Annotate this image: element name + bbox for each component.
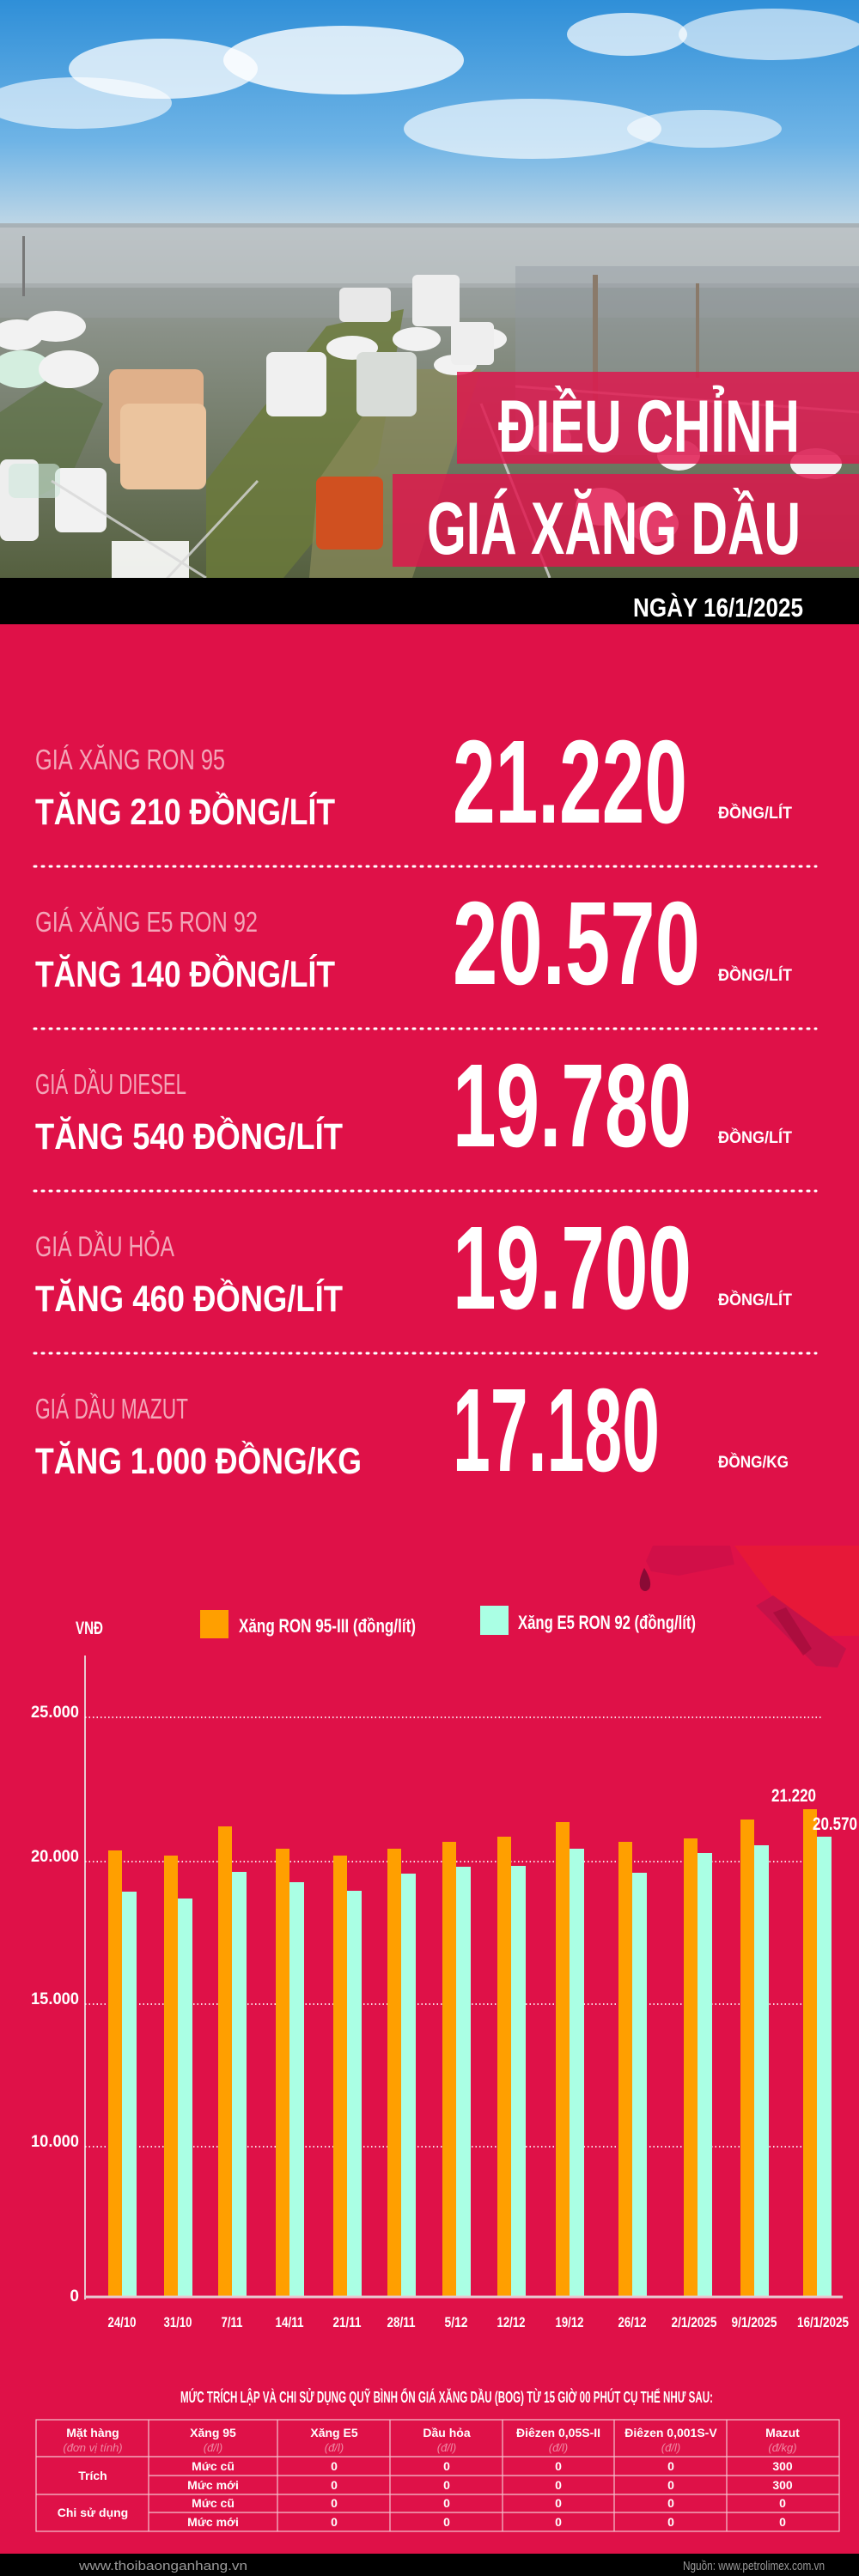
table: BOG fund: (đ/l) (204, 2441, 222, 2454)
price row: RON 95 (34, 716, 816, 866)
bar chart: fuel prices: 0 (70, 2287, 79, 2306)
table: BOG fund: Chi sử dụng (58, 2506, 128, 2519)
bar chart: fuel prices: 9/1/2025 (732, 2314, 777, 2330)
table: BOG fund: Mức mới (187, 2478, 239, 2492)
price row: mazut: TĂNG 1.000 ĐỒNG/KG (35, 1440, 362, 1482)
price row: E5 RON 92: ĐỒNG/LÍT (718, 966, 792, 985)
price row: E5 RON 92: TĂNG 140 ĐỒNG/LÍT (35, 953, 335, 995)
table: BOG fund: Mức mới (187, 2515, 239, 2529)
date bar: NGÀY 16/1/2025 (633, 592, 803, 623)
price row: kerosene: GIÁ DẦU HỎA (35, 1230, 174, 1262)
table: BOG fund: 0 (331, 2478, 338, 2492)
table: BOG fund: Mặt hàng (66, 2426, 119, 2439)
date bar (0, 578, 859, 624)
price row: diesel (34, 1040, 816, 1191)
footer (0, 2554, 859, 2576)
table: BOG fund: 0 (555, 2496, 562, 2510)
table: BOG fund: 0 (779, 2515, 786, 2529)
price row: mazut (35, 1364, 789, 1497)
bar chart: fuel prices: 14/11 (275, 2314, 304, 2330)
price row: diesel: 19.780 (453, 1040, 691, 1172)
bar chart: fuel prices: 12/12 (497, 2314, 526, 2330)
footer: Nguồn: www.petrolimex.com.vn (683, 2559, 825, 2573)
table: BOG fund: 0 (555, 2515, 562, 2529)
price row: diesel: TĂNG 540 ĐỒNG/LÍT (35, 1115, 343, 1157)
chart legend: VNĐ (76, 1619, 103, 1638)
bar chart: fuel prices: 28/11 (387, 2314, 416, 2330)
bar chart: fuel prices: 20.000 (31, 1848, 79, 1866)
table: BOG fund: Điêzen 0,05S-II (516, 2426, 600, 2439)
price row: kerosene: ĐỒNG/LÍT (718, 1291, 792, 1309)
table: BOG fund: (đ/l) (437, 2441, 456, 2454)
table: BOG fund: 0 (443, 2515, 450, 2529)
bar chart: fuel prices: 5/12 (445, 2314, 467, 2330)
price row: mazut: GIÁ DẦU MAZUT (35, 1393, 188, 1425)
table: BOG fund: 0 (667, 2478, 674, 2492)
table: BOG fund (36, 2420, 839, 2531)
price row: kerosene: TĂNG 460 ĐỒNG/LÍT (35, 1278, 343, 1320)
price row: RON 95: 21.220 (453, 716, 687, 848)
price row: E5 RON 92 (34, 878, 816, 1029)
bar chart: fuel prices: 2/1/2025 (672, 2314, 716, 2330)
bar chart: fuel prices: 10.000 (31, 2133, 79, 2151)
bar chart: fuel prices: 21.220 (771, 1786, 816, 1806)
table: BOG fund: 0 (555, 2459, 562, 2473)
table: BOG fund: (đ/l) (549, 2441, 568, 2454)
table: BOG fund: Mức cũ (192, 2496, 235, 2510)
table: BOG fund: 0 (667, 2515, 674, 2529)
table: BOG fund: 0 (331, 2515, 338, 2529)
table: BOG fund: 0 (443, 2459, 450, 2473)
table: BOG fund: 300 (772, 2478, 793, 2492)
bar chart: fuel prices: 21/11 (333, 2314, 361, 2330)
table: BOG fund: Trích (78, 2469, 107, 2482)
table: BOG fund: 0 (667, 2459, 674, 2473)
table: BOG fund: 0 (331, 2496, 338, 2510)
bar chart: fuel prices: 26/12 (618, 2314, 646, 2330)
price row: mazut: ĐỒNG/KG (718, 1453, 789, 1472)
price row: E5 RON 92: 20.570 (453, 878, 700, 1010)
table: BOG fund: (đ/kg) (768, 2441, 797, 2454)
table: BOG fund: Dầu hỏa (423, 2426, 471, 2439)
price row: RON 95: TĂNG 210 ĐỒNG/LÍT (35, 791, 335, 833)
bar chart: fuel prices: 15.000 (31, 1990, 79, 2008)
chart legend: Xăng RON 95-III (đồng/lít) (239, 1615, 416, 1637)
table: BOG fund: 0 (779, 2496, 786, 2510)
table: BOG fund: Xăng E5 (310, 2426, 358, 2439)
table: BOG fund: Mức cũ (192, 2459, 235, 2473)
price row: E5 RON 92: GIÁ XĂNG E5 RON 92 (35, 906, 258, 938)
icon: fuel nozzle (640, 1546, 859, 1668)
table: BOG fund: 0 (331, 2459, 338, 2473)
price row: kerosene: 19.700 (453, 1202, 691, 1334)
bar chart: fuel prices: 19/12 (555, 2314, 584, 2330)
table: BOG fund: 300 (772, 2459, 793, 2473)
table: BOG fund: Mazut (765, 2426, 800, 2439)
bar chart: fuel prices: 25.000 (31, 1704, 79, 1722)
header photo: refinery (0, 0, 859, 601)
table: BOG fund: 0 (667, 2496, 674, 2510)
bar chart: fuel prices: 7/11 (222, 2314, 242, 2330)
price row: diesel: ĐỒNG/LÍT (718, 1128, 792, 1147)
price row: RON 95: GIÁ XĂNG RON 95 (35, 744, 225, 775)
table: BOG fund: 0 (443, 2496, 450, 2510)
bar chart: fuel prices: 24/10 (108, 2314, 136, 2330)
table: BOG fund: 0 (443, 2478, 450, 2492)
price row: kerosene (34, 1202, 816, 1353)
table: BOG fund: Điêzen 0,001S-V (624, 2426, 717, 2439)
price row: mazut: 17.180 (453, 1364, 660, 1497)
table: BOG fund: (đ/l) (325, 2441, 344, 2454)
bar chart: fuel prices (31, 1656, 857, 2330)
table: BOG fund: (đ/l) (661, 2441, 680, 2454)
table: BOG fund: 0 (555, 2478, 562, 2492)
table: BOG fund: (đơn vị tính) (63, 2441, 123, 2454)
footer: www.thoibaonganhang.vn (78, 2559, 247, 2573)
price row: diesel: GIÁ DẦU DIESEL (35, 1068, 186, 1100)
chart legend: Xăng E5 RON 92 (đồng/lít) (518, 1612, 696, 1633)
table: BOG fund: Xăng 95 (190, 2426, 236, 2439)
chart legend (76, 1606, 696, 1638)
price row: RON 95: ĐỒNG/LÍT (718, 804, 792, 823)
bar chart: fuel prices: 31/10 (163, 2314, 192, 2330)
